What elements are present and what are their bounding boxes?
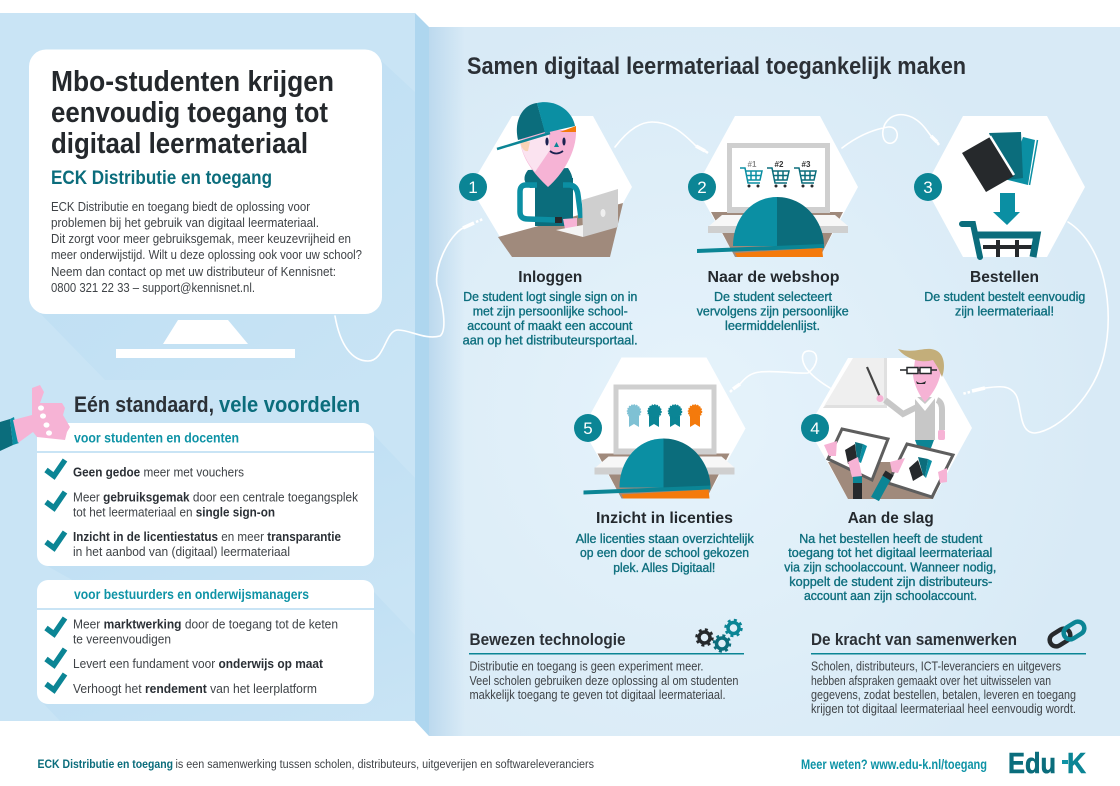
benefit: Meer marktwerking door de toegang tot de keten [73, 618, 338, 632]
logo: Edu-K: Edu [1008, 748, 1056, 780]
hexagon with books and cart illustration [925, 116, 1085, 257]
step text: koppelt de student zijn distributeurs- [789, 575, 992, 589]
check icon [46, 674, 65, 690]
text [470, 660, 739, 702]
intro text: Dit zorgt voor meer gebruiksgemak, meer keuzevrijheid en [51, 232, 351, 246]
check icon [46, 532, 65, 548]
step text: De student selecteert [714, 290, 833, 304]
heading: Bewezen technologie [470, 630, 626, 649]
number badge [459, 173, 487, 201]
text: hebben afspraken gemaakt over het uitwisselen van [811, 674, 1051, 688]
step 4: aan de slag [784, 349, 996, 603]
number badge: 5 [583, 419, 593, 438]
text: Distributie en toegang is geen experiment meer. [470, 660, 704, 674]
benefit: Geen gedoe meer met vouchers [73, 466, 244, 480]
text: gegevens, zodat bestellen, betalen, leveren en toegang [811, 688, 1076, 702]
hexagon with teacher and tablets illustration [808, 349, 972, 499]
step text: De student logt single sign on in [463, 290, 637, 304]
panel: voor bestuurders en onderwijsmanagers [37, 580, 415, 721]
subtitle: ECK Distributie en toegang [51, 168, 272, 189]
check icon [46, 649, 65, 665]
step text [697, 290, 849, 333]
intro text: problemen bij het gebruik van digitaal leermateriaal. [51, 216, 319, 230]
intro text [51, 200, 362, 295]
main heading: Samen digitaal leermateriaal toegankelijk maken [467, 53, 966, 80]
hexagon with student illustration [470, 102, 632, 257]
number badge [914, 173, 942, 201]
step text: via zijn schoolaccount. Wanneer nodig, [784, 560, 996, 574]
panel: right background [429, 27, 1120, 736]
heading: De kracht van samenwerken [811, 630, 1017, 649]
icon: ranked carts: #3 [802, 160, 811, 169]
step text: aan op het distributeursportaal. [463, 334, 638, 348]
step 3: bestellen [914, 116, 1085, 318]
footer text: ECK Distributie en toegang [38, 759, 173, 771]
step text [784, 532, 996, 603]
benefit: Levert een fundament voor onderwijs op maat [73, 657, 324, 671]
intro text: ECK Distributie en toegang biedt de oplossing voor [51, 200, 310, 214]
step text: met zijn persoonlijke school- [473, 304, 628, 318]
step text: toegang tot het digitaal leermateriaal [788, 546, 992, 560]
heading: een standaard [74, 392, 360, 417]
footer text: is een samenwerking tussen scholen, distributeurs, uitgeverijen en softwareleveranciers [176, 759, 594, 771]
check icon [46, 618, 65, 634]
footer link: Meer weten? www.edu-k.nl/toegang [801, 756, 987, 772]
cable: step 4 to step 5 [730, 351, 830, 392]
step heading: Inzicht in licenties [596, 510, 733, 527]
intro text: meer onderwijstijd. Wilt u deze oplossing ook voor uw school? [51, 248, 362, 262]
benefit: Inzicht in de licentiestatus en meer transparantie [73, 530, 341, 544]
text: makkelijk toegang te geven tot digitaal leermateriaal. [470, 688, 726, 702]
number badge [801, 414, 829, 442]
number badge: 2 [697, 178, 707, 197]
icon: gears [696, 620, 742, 652]
text [811, 660, 1076, 716]
step text: plek. Alles Digitaal! [613, 561, 715, 575]
title: digitaal leermateriaal [51, 128, 308, 160]
icon: ranked carts: #2 [775, 160, 784, 169]
text: Scholen, distributeurs, ICT-leveranciers en uitgevers [811, 660, 1061, 674]
benefit [73, 490, 359, 520]
step heading: Inloggen [518, 269, 582, 286]
benefit: Meer gebruiksgemak door een centrale toegangsplek [73, 490, 359, 504]
check icon [46, 460, 65, 476]
step text: Na het bestellen heeft de student [799, 532, 983, 546]
icon: monitor with intro card [29, 50, 415, 380]
step text: leermiddelenlijst. [725, 319, 820, 333]
intro text: Neem dan contact op met uw distributeur of Kennisnet: [51, 265, 336, 279]
icon: ranked carts: #1 [748, 160, 757, 169]
title [51, 66, 334, 160]
icon: ranked carts [740, 160, 816, 188]
benefit [73, 530, 341, 559]
step text [924, 290, 1085, 318]
benefit [73, 618, 338, 646]
page fold [415, 13, 429, 736]
step text: account of maakt een account [467, 319, 633, 333]
step text: account aan zijn schoolaccount. [804, 589, 977, 603]
number badge [688, 173, 716, 201]
panel: left background [0, 13, 415, 721]
step 1: inloggen [459, 102, 638, 348]
hexagon with laptop and cap illustration [696, 116, 858, 257]
number badge: 4 [810, 419, 820, 438]
title: eenvoudig toegang tot [51, 97, 328, 129]
step text: De student bestelt eenvoudig [924, 290, 1085, 304]
heading: een standaard: vele voordelen [219, 392, 360, 417]
benefit: te vereenvoudigen [73, 632, 171, 646]
intro text: 0800 321 22 33 – support@kennisnet.nl. [51, 281, 255, 295]
step heading: Aan de slag [848, 510, 934, 527]
benefit: tot het leermateriaal en single sign-on [73, 506, 275, 520]
panel: voor studenten en docenten [37, 423, 415, 590]
icon: chain link [1047, 619, 1087, 649]
title: Mbo-studenten krijgen [51, 66, 334, 98]
logo: Edu-K: K [1067, 748, 1086, 780]
step 2: naar de webshop [688, 116, 858, 333]
step text [576, 532, 754, 575]
panel: de kracht van samenwerken [811, 619, 1087, 716]
step text [463, 290, 638, 348]
cable: monitor to step 1 [335, 219, 483, 361]
cable: step 1 to step 2 [615, 122, 708, 153]
step text: zijn leermateriaal! [955, 304, 1054, 318]
step heading: Naar de webshop [708, 269, 840, 286]
number badge: 1 [468, 178, 478, 197]
step heading: Bestellen [970, 269, 1039, 286]
number badge [574, 414, 602, 442]
cable: step 3 to step 4 [962, 222, 1108, 433]
number badge: 3 [923, 178, 933, 197]
step text: Alle licenties staan overzichtelijk [576, 532, 754, 546]
step 5: inzicht in licenties [574, 358, 754, 575]
benefit: in het aanbod van (digitaal) leermateriaal [73, 545, 290, 559]
benefit: Verhoogt het rendement van het leerplatform [73, 682, 317, 696]
text: krijgen tot digitaal leermateriaal heel eenvoudig wordt. [811, 702, 1076, 716]
check icon [46, 492, 65, 508]
icon: thumbs up [0, 385, 70, 451]
step text: vervolgens zijn persoonlijke [697, 304, 849, 318]
icon: license badges [628, 405, 702, 427]
sub-heading: voor studenten en docenten [74, 430, 239, 446]
sub-heading: voor bestuurders en onderwijsmanagers [74, 587, 309, 602]
hexagon with laptop and cap illustration [582, 358, 746, 498]
text: Veel scholen gebruiken deze oplossing al om studenten [470, 674, 739, 688]
step text: op een door de school gekozen [580, 546, 749, 560]
cable: step 2 to step 3 [842, 115, 939, 148]
heading: een standaard: Eén standaard, [74, 392, 214, 417]
panel: bewezen technologie [469, 620, 744, 702]
